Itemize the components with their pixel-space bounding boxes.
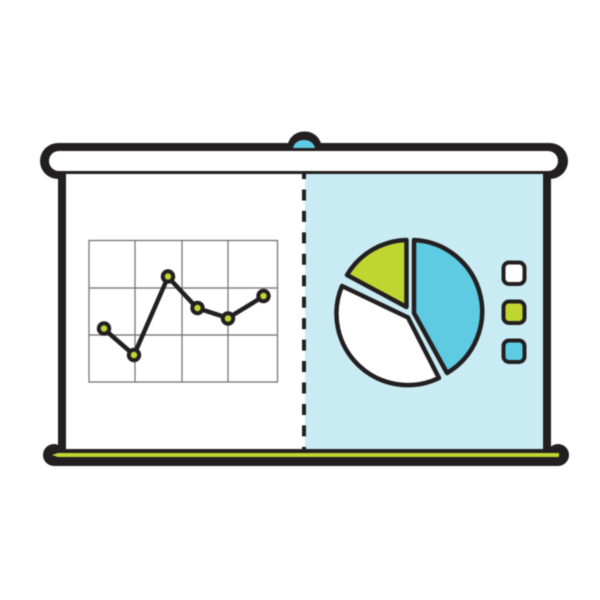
data points	[99, 271, 269, 360]
line chart	[89, 240, 278, 382]
green slice	[347, 240, 406, 307]
bottom bar	[43, 444, 569, 466]
blue slice	[414, 240, 482, 373]
legend swatch green	[504, 302, 524, 323]
white slice	[336, 286, 439, 385]
chart grid	[89, 240, 278, 382]
knob inset	[293, 140, 315, 148]
legend swatch white	[504, 262, 524, 284]
legend	[504, 262, 524, 362]
knob on roller	[287, 132, 322, 148]
pie chart	[336, 240, 482, 385]
top roller	[40, 143, 568, 179]
screen panel	[58, 174, 551, 454]
dashed divider	[302, 174, 306, 452]
data line	[104, 277, 264, 355]
legend swatch blue	[504, 340, 524, 362]
